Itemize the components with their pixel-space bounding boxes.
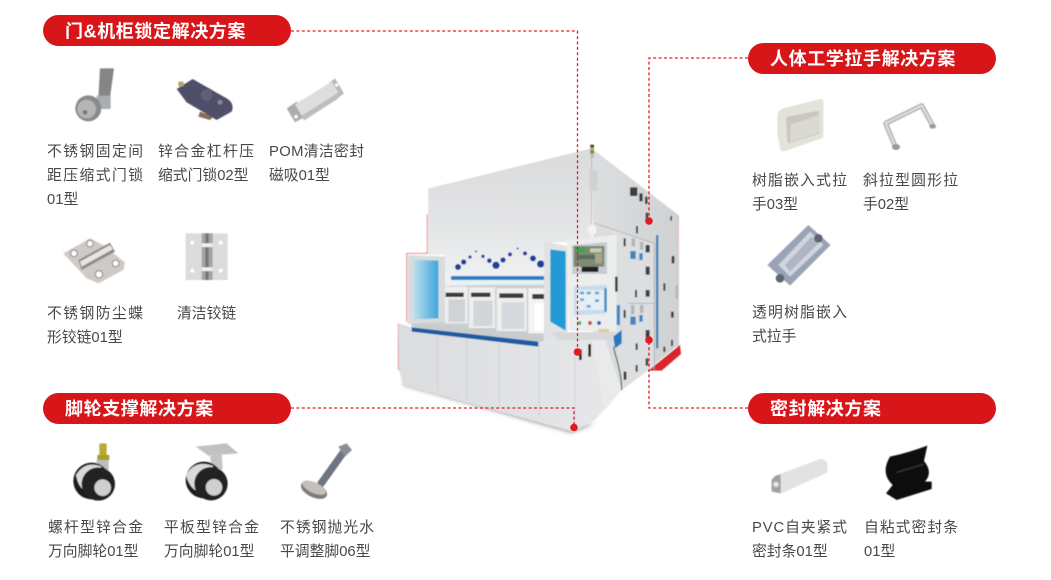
text: product labels: 形铰链01型 <box>47 328 123 346</box>
text: product labels: 透明树脂嵌入 <box>752 304 847 321</box>
connector: caster support <box>291 408 578 431</box>
text: product labels: PVC自夹紧式 <box>752 519 847 536</box>
work bay background <box>408 283 558 343</box>
text: product labels: 手02型 <box>863 196 909 213</box>
panel: door and cabinet lock solutions <box>43 15 364 346</box>
panel: sealing solutions <box>748 393 996 560</box>
text: product labels: 自粘式密封条 <box>864 519 958 536</box>
front base <box>398 323 622 432</box>
icon: slanted round handle <box>886 106 936 150</box>
heading: ergonomic handle <box>748 43 996 74</box>
icon: POM magnetic catch <box>287 78 344 122</box>
control tower <box>567 235 617 332</box>
text: product labels: 不锈钢抛光水 <box>280 519 374 536</box>
icon: PVC clamp seal strip <box>772 459 827 493</box>
icon: cam lock <box>75 68 114 121</box>
heading: door and cabinet lock: 门&机柜锁定解决方案 <box>65 20 246 42</box>
icon: resin recessed handle <box>777 99 823 151</box>
text: product labels <box>47 143 364 346</box>
connector: ergonomic handle <box>645 58 748 225</box>
central machine illustration <box>398 145 681 433</box>
text: product labels: 清洁铰链 <box>177 304 236 322</box>
text: product labels: 手03型 <box>752 196 798 213</box>
heading: ergonomic handle: 人体工学拉手解决方案 <box>770 48 956 69</box>
panel: ergonomic handle solutions <box>748 43 996 345</box>
text: product labels: 不锈钢固定间 <box>47 143 143 160</box>
text: product labels: 距压缩式门锁 <box>47 167 143 184</box>
blue dots <box>455 247 544 270</box>
text: product labels: 平板型锌合金 <box>164 518 259 536</box>
icon: flat plate caster <box>186 443 238 500</box>
icon: stainless levelling foot <box>298 443 352 503</box>
heading: sealing <box>748 393 996 424</box>
text: product labels: 式拉手 <box>752 328 797 345</box>
text: product labels: 斜拉型圆形拉 <box>863 172 958 189</box>
text: product labels: 磁吸01型 <box>269 167 330 184</box>
icon: self-adhesive black seal strip <box>886 446 932 500</box>
icon: transparent resin handle <box>767 225 831 286</box>
icon: zinc alloy lever lock <box>177 79 233 120</box>
left door <box>408 255 445 324</box>
signal tower <box>590 145 594 148</box>
text: product labels: 万向脚轮01型 <box>48 543 139 560</box>
icon: threaded stem caster <box>73 443 115 501</box>
text: product labels: 密封条01型 <box>752 543 828 560</box>
text: product labels: 锌合金杠杆压 <box>158 143 254 160</box>
icon: clean hinge <box>186 233 228 280</box>
icon: butterfly hinge <box>63 238 125 283</box>
text: product labels: 01型 <box>47 191 78 208</box>
text: product labels <box>752 172 958 345</box>
heading: sealing: 密封解决方案 <box>770 398 882 419</box>
panel: caster support solutions <box>43 393 374 560</box>
connector: sealing <box>645 336 748 408</box>
text: product labels: POM清洁密封 <box>269 143 364 160</box>
right door <box>544 242 568 340</box>
text: product labels: 螺杆型锌合金 <box>48 519 143 536</box>
text: product labels: 树脂嵌入式拉 <box>752 172 847 189</box>
text: product labels <box>752 519 958 560</box>
text: product labels: 不锈钢防尘蝶 <box>47 305 143 322</box>
heading: door and cabinet lock <box>43 15 291 46</box>
connector: door and cabinet lock <box>291 31 581 356</box>
text: product labels: 缩式门锁02型 <box>158 167 249 184</box>
heading: caster support: 脚轮支撑解决方案 <box>65 398 214 419</box>
text: product labels: 01型 <box>864 543 895 560</box>
text: product labels: 万向脚轮01型 <box>164 543 255 560</box>
text: product labels <box>48 518 374 560</box>
heading: caster support <box>43 393 291 424</box>
stations <box>445 287 559 333</box>
text: product labels: 平调整脚06型 <box>280 543 371 560</box>
